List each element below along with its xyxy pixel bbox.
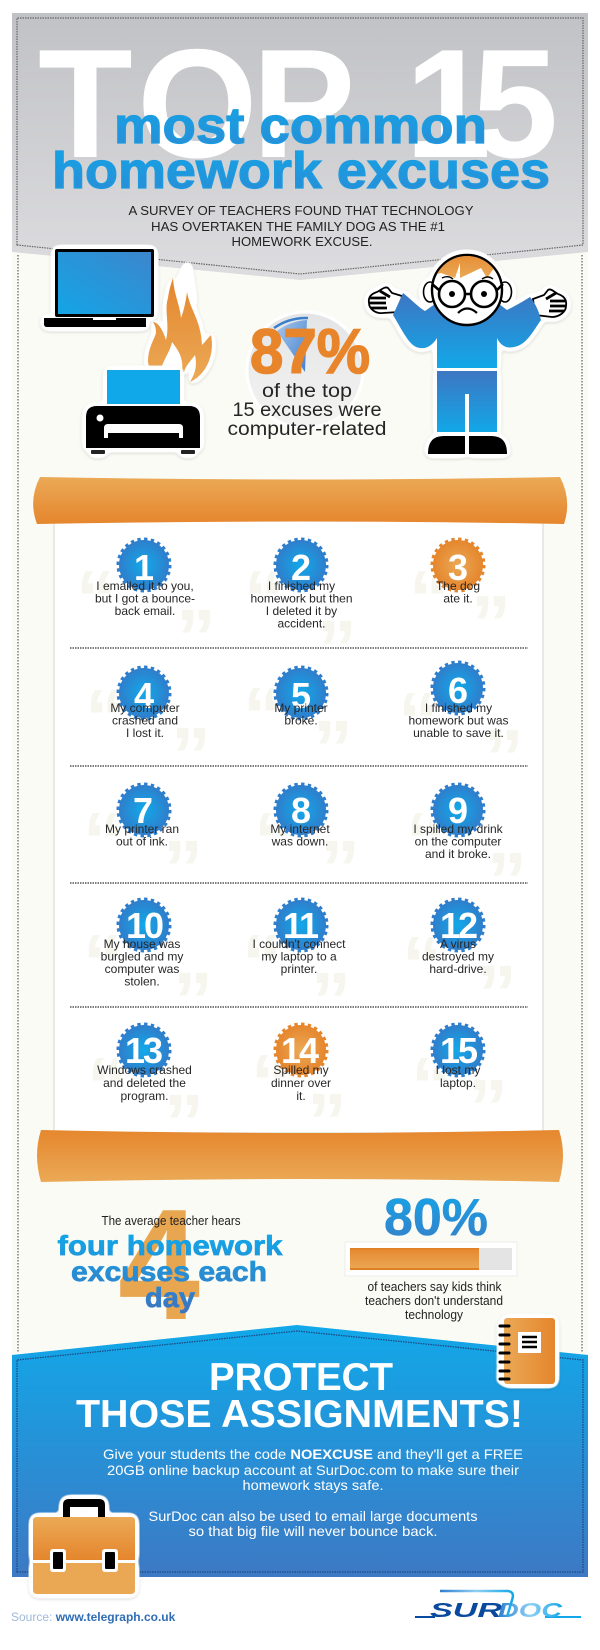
icon: laptop — [44, 249, 154, 327]
excuse 1: ” — [176, 593, 216, 682]
heading: THOSE ASSIGNMENTS! — [76, 1393, 523, 1436]
excuse 3: “ — [409, 554, 449, 643]
excuse 13: ” — [164, 1078, 204, 1167]
excuse 15: ” — [468, 1063, 508, 1152]
excuse 15: laptop. — [440, 1076, 476, 1090]
excuse 5: “ — [243, 671, 283, 760]
excuse 13: Windows crashed — [97, 1063, 192, 1077]
panel: header — [12, 13, 588, 280]
heading — [76, 1356, 523, 1436]
excuse 10: My house was — [104, 937, 180, 951]
excuse 11: my laptop to a — [261, 950, 337, 964]
excuse 9: 9 — [448, 790, 468, 831]
ears — [424, 282, 512, 302]
excuse 9: “ — [406, 796, 446, 885]
excuse 4: “ — [85, 673, 125, 762]
title: most common: most common — [114, 97, 487, 154]
heading: PROTECT — [209, 1356, 393, 1399]
glasses — [432, 281, 503, 307]
banner: bottom scroll — [37, 1130, 563, 1182]
excuse 14 — [251, 1022, 347, 1166]
excuse 12: destroyed my — [422, 950, 494, 964]
subtitle — [128, 203, 474, 249]
hair — [436, 256, 494, 278]
text: teachers — [365, 1280, 503, 1322]
excuse 9: on the computer — [415, 834, 501, 848]
shirt — [393, 293, 541, 368]
excuse 5: ” — [313, 704, 353, 793]
icon: printer — [86, 370, 200, 454]
excuse 6: I finished my — [425, 701, 492, 715]
excuse 15: 15 — [440, 1030, 478, 1071]
logo: SurDoc: DOC — [498, 1600, 563, 1622]
big number 4: 4 — [118, 1177, 200, 1353]
text: of the top 15 excuses: of the top — [262, 381, 352, 402]
excuse 2 — [244, 536, 357, 693]
excuse 8: My internet — [270, 822, 330, 836]
excuse 4: My computer — [110, 701, 180, 715]
progress bar — [345, 1242, 517, 1276]
text: large documents: SurDoc can also be used to email large documents — [148, 1508, 478, 1524]
excuse 12: hard-drive. — [429, 962, 487, 976]
excuse 10: stolen. — [124, 974, 160, 988]
text: of the top 15 excuses: 15 excuses were — [232, 400, 382, 421]
number 80%: 80% — [384, 1189, 488, 1247]
text: four homework excuses each day: excuses each — [71, 1256, 267, 1287]
excuse 4: ” — [171, 711, 211, 800]
excuse 10: 10 — [126, 905, 163, 946]
icon: briefcase — [33, 1499, 135, 1594]
excuse 12: 12 — [440, 905, 477, 946]
excuse 13: “ — [87, 1041, 127, 1130]
text: code offer: homework stays safe. — [242, 1477, 384, 1493]
excuse 14: Spilled my — [273, 1063, 329, 1077]
excuse 6: “ — [398, 676, 438, 765]
excuse 6 — [398, 660, 524, 802]
subtitle: HAS OVERTAKEN THE FAMILY DOG AS THE #1 — [151, 219, 445, 234]
subtitle: A SURVEY OF TEACHERS FOUND THAT TECHNOLOGY — [128, 203, 474, 218]
text: code offer — [103, 1446, 523, 1493]
excuse 5: broke. — [284, 714, 318, 728]
logo: SurDoc: SUR — [430, 1600, 503, 1622]
excuse 10: “ — [83, 918, 123, 1007]
excuse 12 — [402, 896, 517, 1038]
text: average teacher: The average teacher hears — [102, 1214, 240, 1228]
excuse 8: ” — [320, 824, 360, 913]
title: homework excuses: homework excuses — [52, 142, 550, 199]
excuse 2: accident. — [277, 616, 326, 630]
text: of the top 15 excuses — [228, 381, 386, 440]
stat: 80 percent — [345, 1189, 517, 1322]
excuse 7: out of ink. — [116, 834, 168, 848]
text: code offer: Give your students the code NOEXCUSE and they'll get a FREE — [103, 1446, 523, 1462]
pants — [437, 371, 497, 432]
excuse 6: 6 — [448, 670, 468, 711]
excuse 3: The dog — [436, 579, 480, 593]
excuse 4 — [85, 664, 211, 800]
excuse 1 — [76, 536, 216, 682]
excuse 10: computer was — [105, 962, 179, 976]
cream background panel — [12, 245, 588, 1360]
text: large documents: so that big file will never bounce back. — [188, 1523, 438, 1539]
excuse 11: I couldn't connect — [252, 937, 346, 951]
title: TOP 15: TOP 15 — [38, 17, 558, 190]
excuse 9: ” — [487, 836, 527, 925]
excuse 14: ” — [307, 1077, 347, 1166]
excuse 9: I spilled my drink — [413, 822, 504, 836]
excuse 11: 11 — [283, 905, 319, 946]
hands — [369, 287, 566, 317]
excuse 2: homework but then — [250, 592, 353, 606]
text: large documents — [148, 1508, 478, 1539]
text: of the top 15 excuses: computer-related — [228, 419, 386, 440]
subtitle: HOMEWORK EXCUSE. — [232, 234, 372, 249]
excuse 11 — [242, 896, 351, 1045]
excuse 13: program. — [120, 1089, 169, 1103]
icon: confused boy — [369, 250, 566, 454]
eyes — [449, 291, 487, 297]
excuse 1: I emailed it to you, — [96, 579, 194, 593]
excuse 7: “ — [83, 796, 123, 885]
excuse 11: “ — [242, 918, 282, 1007]
excuse 3 — [409, 536, 511, 668]
stat: 87%: 87% — [250, 317, 370, 387]
icon: notebook — [500, 1318, 555, 1384]
excuse 10 — [83, 896, 213, 1045]
text: four homework excuses each day: day — [145, 1282, 195, 1313]
excuse 8 — [254, 782, 360, 913]
text: teachers: teachers don't understand — [365, 1294, 503, 1308]
excuse 3: ” — [471, 579, 511, 668]
excuse 14: dinner over — [271, 1076, 331, 1090]
chart: 87 percent pie — [247, 312, 363, 428]
excuse 14: 14 — [281, 1030, 319, 1071]
excuse 2: 2 — [291, 547, 311, 588]
excuse 11: ” — [311, 956, 351, 1045]
excuse 5: My printer — [274, 701, 328, 715]
excuse 15: “ — [411, 1041, 451, 1130]
excuse 14: it. — [296, 1089, 306, 1103]
text: four homework excuses each day — [58, 1230, 283, 1313]
excuse 9 — [406, 782, 527, 925]
excuse 7: ” — [163, 824, 203, 913]
excuse 8: was down. — [271, 834, 328, 848]
eyebrows — [442, 277, 493, 279]
excuse 7: My printer ran — [105, 822, 179, 836]
text: code offer: 20GB online backup account at SurDoc.com to make sure their — [107, 1462, 519, 1478]
panel: protect — [12, 1325, 588, 1577]
excuse 4: crashed and — [112, 714, 178, 728]
source: Source: www.telegraph.co.uk — [11, 1610, 176, 1624]
logo: SurDoc — [415, 1591, 581, 1622]
excuse 10: burgled and my — [101, 950, 183, 964]
excuse 6: ” — [484, 713, 524, 802]
text: four homework excuses each day: four homework — [58, 1230, 283, 1261]
panel: excuses paper — [54, 515, 543, 1133]
excuse 3: ate it. — [443, 592, 473, 606]
excuse 8: 8 — [291, 790, 311, 831]
excuse 10: ” — [173, 956, 213, 1045]
excuse 1: back email. — [115, 604, 175, 618]
excuse 13 — [87, 1022, 204, 1167]
icon: flame — [148, 262, 212, 382]
excuse 15 — [411, 1022, 508, 1152]
excuse 4: I lost it. — [126, 726, 164, 740]
excuse 5: 5 — [291, 675, 311, 716]
excuse 3: 3 — [448, 547, 468, 588]
excuse 6: homework but was — [408, 714, 509, 728]
excuse 13: 13 — [125, 1030, 162, 1071]
excuse 1: but I got a bounce- — [95, 592, 195, 606]
excuse 2: I deleted it by — [266, 604, 337, 618]
excuse 12: ” — [477, 949, 517, 1038]
excuse 1: “ — [76, 554, 116, 643]
excuse 15: I lost my — [436, 1063, 480, 1077]
excuse 13: and deleted the — [103, 1076, 186, 1090]
excuse 7 — [83, 782, 203, 913]
excuse 8: “ — [254, 796, 294, 885]
excuse 2: I finished my — [268, 579, 335, 593]
shoes — [428, 436, 465, 454]
excuse 5 — [243, 664, 353, 793]
excuse 11: printer. — [281, 962, 317, 976]
excuse 2: ” — [317, 604, 357, 693]
excuse 14: “ — [251, 1038, 291, 1127]
head — [432, 255, 502, 325]
stat: four excuses a day — [58, 1177, 283, 1353]
excuse 7: 7 — [133, 790, 153, 831]
excuse 12: “ — [402, 920, 442, 1009]
excuse 2: “ — [244, 554, 284, 643]
banner: top scroll — [33, 477, 567, 524]
excuse 9: and it broke. — [425, 847, 491, 861]
excuse 1: 1 — [134, 547, 154, 588]
excuse 4: 4 — [134, 675, 154, 716]
text: teachers: technology — [405, 1308, 464, 1322]
text: teachers: of teachers say kids think — [368, 1280, 502, 1294]
excuse 6: unable to save it. — [413, 726, 504, 740]
excuse 12: A virus — [440, 937, 476, 951]
frown — [458, 308, 477, 313]
